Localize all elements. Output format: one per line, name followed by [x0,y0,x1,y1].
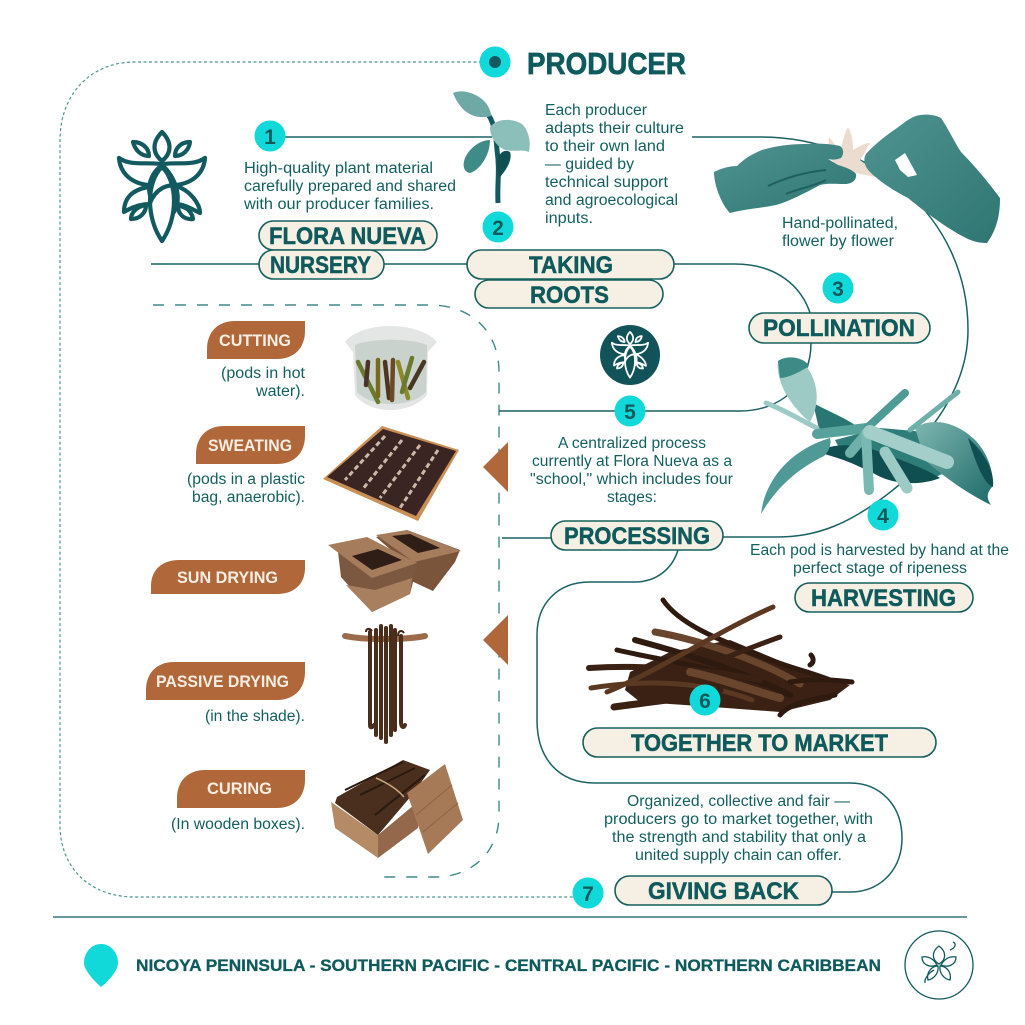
icon: producer dot [480,46,510,78]
right hand [864,115,1000,243]
flower [829,127,880,179]
step 5 badge [614,396,646,426]
step 3 badge: 3 [832,278,844,301]
text: step 1 description [243,160,456,213]
pill: giving back: GIVING BACK [648,878,800,905]
right leaves [915,422,993,505]
illustration: seedling [453,91,530,203]
illustration: vanilla pods pile [589,600,852,715]
top leaf [778,358,817,422]
text: sweating note: (pods in a plastic [187,471,305,488]
pill: roots: ROOTS [530,282,609,309]
illustration: drying boxes [328,530,461,612]
step 3 badge [822,272,854,304]
text: curing note: (In wooden boxes). [171,816,305,833]
illustration: beaker [345,326,437,410]
tab: sweating [196,426,305,464]
text: market description [604,793,873,864]
illustration: tray of pods [323,426,459,521]
text: hand-pollinated [782,215,898,250]
text: market description: producers go to market together, with [604,811,873,828]
text: market description: united supply chain can offer. [635,847,842,864]
pill: roots [475,280,663,309]
tab: curing: CURING [207,780,272,798]
tab: sun drying: SUN DRYING [177,569,278,587]
text: step 1 description: with our producer families. [243,196,434,213]
tab: cutting: CUTTING [219,332,291,350]
pill: taking [467,250,674,279]
tab: sun drying [151,560,305,594]
text: cutting note [221,365,306,400]
step 5 badge: 5 [624,401,636,424]
connector: step 1 to step 2 [285,136,492,138]
stage: cutting [207,321,437,410]
pill: harvesting: HARVESTING [811,585,956,612]
text: passive drying note: (in the shade). [205,708,305,725]
tab: passive drying [146,662,305,700]
connector: taking roots to pollination [674,264,811,316]
text: step 4 description [750,542,1009,577]
dark body [816,445,940,483]
connector: harvest to processing [723,480,905,537]
connector: outer dotted loop [60,62,576,897]
text: regions: NICOYA PENINSULA - SOUTHERN PACIFIC - CENTRAL PACIFIC - NORTHERN CARIBBEAN [136,957,881,975]
step 4 badge [868,500,898,530]
illustration: hands pollinating flower [714,115,1000,243]
text: step 2 description: technical support [545,174,669,191]
text: step 2 description: to their own land [545,138,665,155]
pill: flora nueva: FLORA NUEVA [269,223,426,250]
text: step 5 description: stages: [607,489,657,506]
stage: sweating [187,426,459,521]
step 1 badge [254,120,286,152]
divider: footer rule [53,916,967,918]
text: step 2 description: inputs. [545,210,593,227]
pods [817,392,958,490]
connector: processing to market [502,538,902,892]
pill: giving back [615,876,832,905]
step 4 badge: 4 [877,505,889,528]
stalk [766,403,817,428]
text: step 5 description: currently at Flora Nueva as a [532,453,732,470]
left hand [714,144,856,213]
tab: passive drying: PASSIVE DRYING [156,673,289,691]
pill: pollination: POLLINATION [763,315,915,342]
step 7 badge [572,878,604,908]
text: sweating note: bag, anaerobic). [192,489,305,506]
icon: location pin [84,944,118,987]
icon: logo badge [600,325,660,385]
illustration: vanilla orchid [761,357,993,514]
arrow: processing lower [483,615,508,665]
text: cutting note: water). [255,383,305,400]
heading: producer [480,46,686,81]
left long leaf [761,438,831,514]
tab: sweating: SWEATING [208,437,292,455]
stage: curing [171,760,463,858]
connector: inner dashed bracket [153,305,499,877]
step 2 badge [482,212,514,242]
text: sweating note [187,471,305,506]
pill: nursery: NURSERY [270,252,371,279]
text: step 2 description: Each producer [545,102,647,119]
stage: passive drying [146,626,425,742]
step 2 badge: 2 [492,217,504,240]
connector: pollination to processing [499,343,811,411]
pill: processing: PROCESSING [564,523,710,550]
pill: together to market: TOGETHER TO MARKET [631,730,888,757]
step 1 badge: 1 [264,126,276,149]
text: step 5 description [530,435,733,506]
text: step 1 description: carefully prepared and shared [244,178,456,195]
title: PRODUCER [527,46,686,81]
text: market description: Organized, collective and fair — [627,793,851,810]
text: step 2 description [545,102,684,227]
step 6 badge [690,684,720,716]
connector: step 2 to hands [692,137,968,435]
tab: cutting [207,321,305,359]
tab: curing [177,770,305,808]
text: step 1 description: High-quality plant material [244,160,433,177]
text: step 4 description: perfect stage of ripeness [793,560,967,577]
pill: taking: TAKING [529,252,613,279]
icon: flora nueva logo [119,132,205,241]
text: step 2 description: adapts their culture [545,120,684,137]
step 7 badge: 7 [582,883,594,906]
dark leaf [813,403,862,435]
stage: sun drying [151,530,461,612]
mid mass [835,428,955,482]
text: step 2 description: — guided by [545,156,634,173]
text: step 5 description: A centralized process [558,435,706,452]
text: step 2 description: and agroecological [545,192,678,209]
text: market description: the strength and stability that only a [612,829,866,846]
text: hand-pollinated: flower by flower [782,233,894,250]
text: step 5 description: "school," which includes four [530,471,733,488]
illustration: wooden box with lid [331,760,463,858]
text: hand-pollinated: Hand-pollinated, [782,215,898,232]
connector: nursery to taking roots [151,263,467,265]
text: step 4 description: Each pod is harvested by hand at the [750,542,1009,559]
text: cutting note: (pods in hot [221,365,306,382]
icon: flower badge [905,931,973,999]
arrow: processing upper [483,442,508,492]
illustration: hanging pods [345,626,425,742]
step 6 badge: 6 [699,690,711,713]
